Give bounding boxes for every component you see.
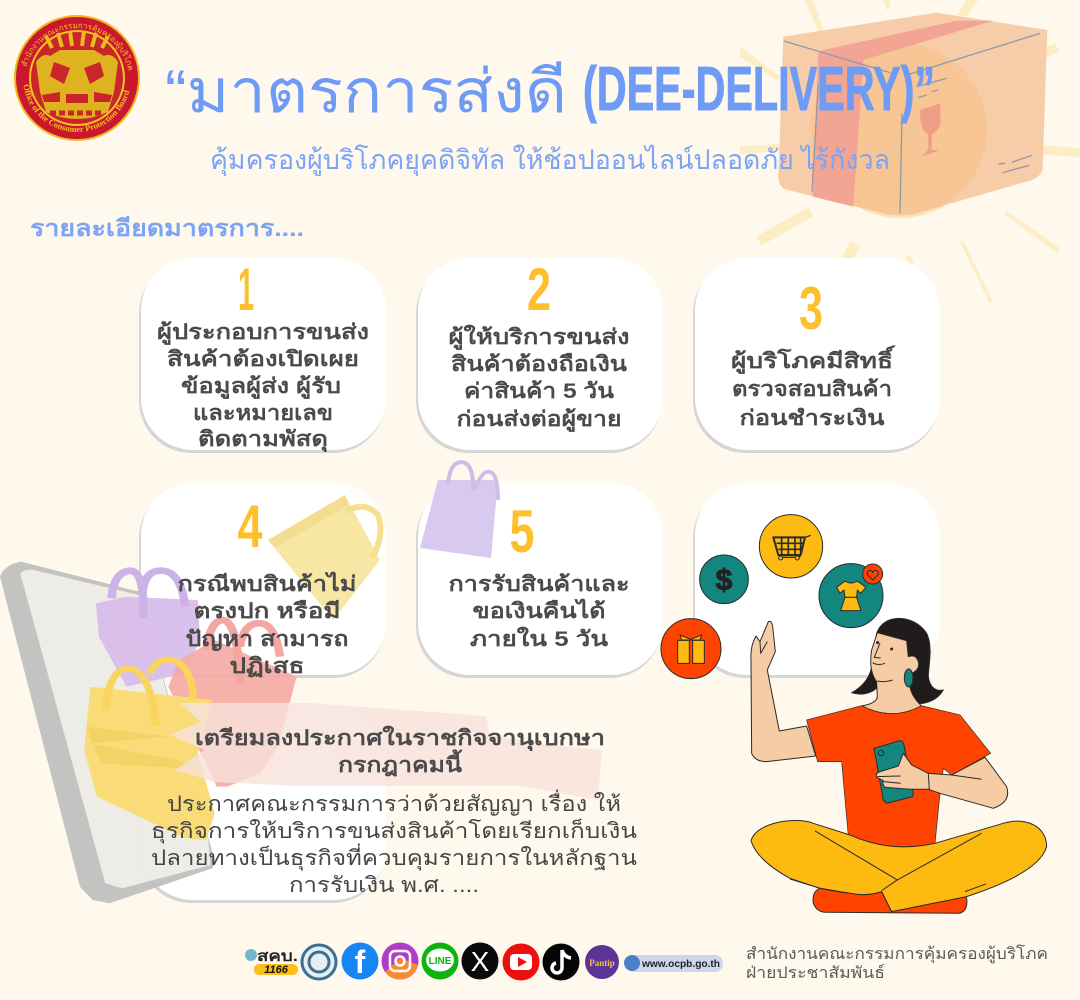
footer: youtube [502,944,540,980]
card 2 content: 2 [527,256,551,323]
card 4 content [178,493,356,678]
title [165,55,935,125]
card 4 content: ปฏิเสธ [230,655,304,678]
card 1 content: สินค้าต้องเปิดเผย [167,347,359,371]
footer: hotline badge [245,948,298,976]
trousers [751,820,1047,912]
announcement body: ปลายทางเป็นธุรกิจที่ควบคุมรายการในหลักฐาน [151,843,637,871]
socks [813,888,967,913]
card 1 [139,258,386,453]
card 5 [416,483,663,678]
right arm [927,757,1008,808]
footer: tiktok [542,944,580,980]
card 4 [139,483,386,678]
phone [874,741,913,803]
card 2 content: ก่อนส่งต่อผู้ขาย [456,407,622,433]
footer: hotline badge: 1166 [264,964,289,976]
footer: facebook [342,942,378,980]
announcement body: ธุรกิจการให้บริการขนส่งสินค้าโดยเรียกเก็บเงิน [151,817,637,844]
footer: office credit [746,944,1048,982]
card 6 [693,483,940,678]
footer: OCPB logo [302,945,336,979]
announcement heading [195,725,605,777]
illustration: woman with phone and shopping icons [661,515,1047,913]
card 5 content [448,498,630,651]
icon: gift [661,619,721,679]
footer: pantip: Pantip [589,958,615,968]
footer: website: www.ocpb.go.th [641,958,720,970]
hair [852,618,943,704]
yellow bag on card 4 [268,495,380,620]
neck and face [862,633,922,714]
card 1 content: ผู้ประกอบการขนส่ง [157,320,369,346]
illustration: phone and shopping bags [0,562,297,903]
announcement body [151,789,637,897]
card 1 content: ติดตามพัสดุ [198,428,328,453]
card 4 content: กรณีพบสินค้าไม่ [178,571,356,596]
footer: office credit: ฝ่ายประชาสัมพันธ์ [746,963,885,982]
torn tape banner [170,703,602,800]
card 3 [693,258,940,453]
icon: cart [759,515,823,578]
footer: instagram [382,942,418,980]
title: “มาตรการส่งดี [165,58,567,125]
card 5 content: 5 [510,498,534,565]
card 3 content: ผู้บริโภคมีสิทธิ์ [731,345,896,375]
card 3 content [731,275,896,430]
announcement heading: เตรียมลงประกาศในราชกิจจานุเบกษา [195,725,605,752]
card 5 content: ภายใน 5 วัน [470,626,609,651]
card 1 content [157,256,369,453]
card 2 content: สินค้าต้องถือเงิน [451,352,628,376]
card 5 content: การรับสินค้าและ [448,572,630,596]
card 3 content: 3 [799,275,823,342]
footer: line [422,942,458,980]
logo: consumer protection board seal: Office of the Consumer Protection Board [24,84,130,132]
footer: pantip [585,945,619,979]
subtitle: คุ้มครองผู้บริโภคยุคดิจิทัล ให้ช้อปออนไลน์ปลอดภัย ไร้กังวล [210,144,890,177]
shirt [807,706,991,847]
footer: X: X [471,946,490,977]
raised arm [751,621,816,762]
card 2 content [448,256,630,433]
icon: dollar: $ [716,564,733,597]
announcement heading: กรกฎาคมนี้ [338,749,463,777]
footer: line: LINE [429,956,452,967]
card 5 content: ขอเงินคืนได้ [472,598,606,623]
card 1 content: ข้อมูลผู้ส่ง ผู้รับ [181,374,341,400]
card 7 [139,705,386,903]
icon: dollar [700,555,748,604]
card 1 content: 1 [238,256,254,323]
illustration: parcel box with sun rays [740,0,1080,303]
card 2 [416,258,663,453]
card 4 content: ปัญหา สามารถ [186,628,348,652]
card 1 content: และหมายเลข [193,402,333,425]
hand [876,753,929,789]
footer: website [624,955,723,972]
card 3 content: ตรวจสอบสินค้า [732,377,892,401]
announcement body: ประกาศคณะกรรมการว่าด้วยสัญญา เรื่อง ให้ [167,789,621,816]
card 3 content: ก่อนชำระเงิน [740,407,885,430]
card 4 content: ตรงปก หรือมี [194,599,340,623]
announcement body: การรับเงิน พ.ศ. .... [289,874,479,897]
section heading: รายละเอียดมาตรการ.... [30,215,304,241]
footer: hotline badge: สคบ. [257,948,298,965]
logo: consumer protection board seal: สำนักงานคณะกรรมการคุ้มครองผู้บริโภค [21,24,132,70]
card 2 content: ผู้ให้บริการขนส่ง [448,324,630,351]
card 4 content: 4 [238,493,263,560]
logo: consumer protection board seal [14,15,140,141]
footer: facebook: f [355,944,366,980]
footer: X [462,942,498,980]
card 2 content: ค่าสินค้า 5 วัน [464,379,615,403]
purple bag above card 5 [420,462,498,558]
footer: office credit: สำนักงานคณะกรรมการคุ้มครองผู้บริโภค [746,944,1048,964]
icon: dress with heart [819,564,883,628]
